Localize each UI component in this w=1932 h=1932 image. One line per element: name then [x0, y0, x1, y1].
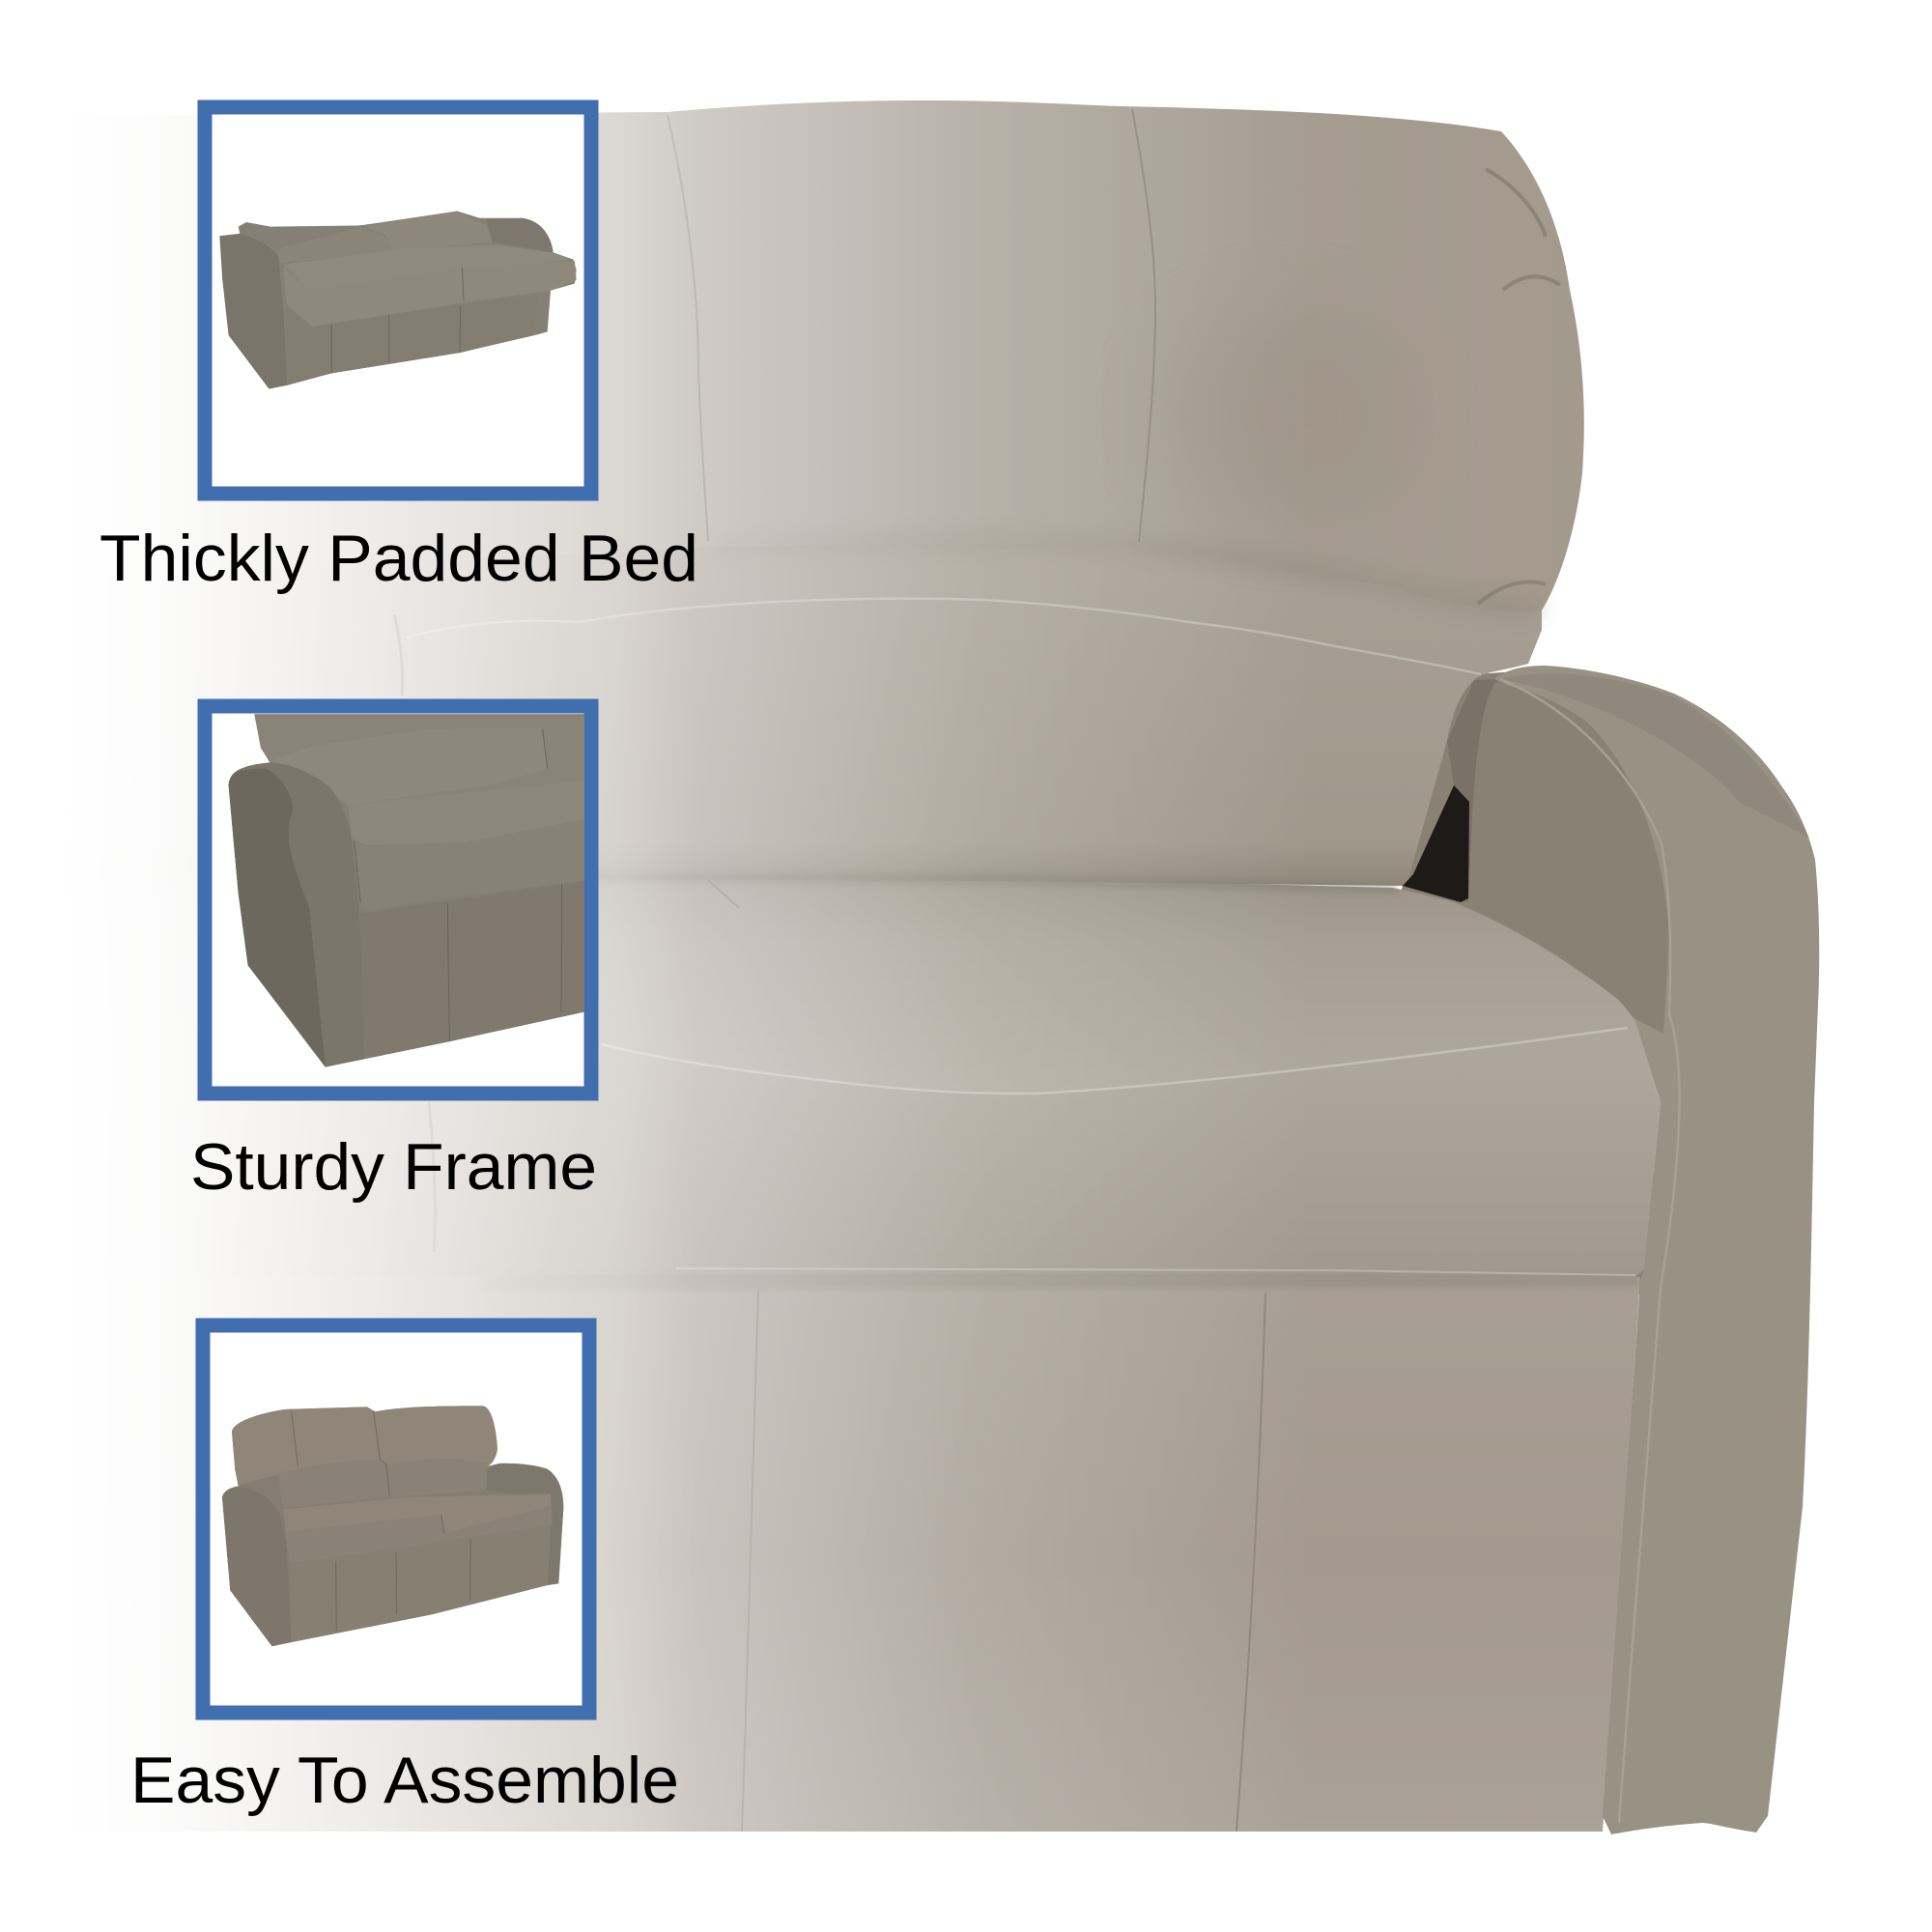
head to back crease shadow — [715, 534, 1542, 616]
feature card: sturdy frame — [190, 706, 597, 1204]
lower back stitching — [406, 599, 1481, 674]
feature card: easy to assemble — [130, 1325, 679, 1817]
sofa base panel — [58, 1277, 1640, 1832]
arm stitching — [1500, 679, 1680, 1823]
base panel seams — [742, 1291, 1265, 1832]
seat top crease — [708, 880, 739, 908]
arm inner panel — [1468, 683, 1669, 1034]
card frame — [205, 107, 591, 494]
seat cushion top — [58, 874, 1661, 1102]
shadow underlay between cushions and arm — [1401, 671, 1739, 1294]
seat bottom piping — [676, 1268, 1635, 1275]
feature card: thickly padded bed — [99, 107, 698, 595]
card caption: Sturdy Frame — [190, 1130, 597, 1204]
headrest gathers — [1478, 169, 1560, 604]
arm outer front — [1494, 666, 1819, 1834]
card frame — [203, 1325, 589, 1713]
seat back shadow — [483, 871, 1401, 894]
headrest cushion — [58, 100, 1584, 611]
arm fold shade — [1447, 679, 1497, 902]
lower back cushion — [58, 541, 1542, 886]
seat cushion front — [58, 1028, 1661, 1277]
full sofa thumbnail — [222, 1406, 563, 1646]
white left fade — [0, 97, 1352, 1835]
mechanism gap — [1403, 785, 1469, 902]
arm top shade — [1500, 673, 1809, 838]
seat cushion piping — [601, 1028, 1628, 1094]
sofa arm close-up thumbnail — [229, 714, 584, 1067]
faint cushion outlines — [394, 614, 435, 1252]
headrest seams — [668, 109, 1155, 542]
card frame — [205, 706, 591, 1094]
sofa with extended bed thumbnail — [219, 212, 577, 388]
headrest mottled shading — [1159, 309, 1410, 522]
card caption: Thickly Padded Bed — [99, 522, 698, 595]
card caption: Easy To Assemble — [130, 1744, 679, 1817]
seat bottom shadow band — [483, 1275, 1638, 1291]
